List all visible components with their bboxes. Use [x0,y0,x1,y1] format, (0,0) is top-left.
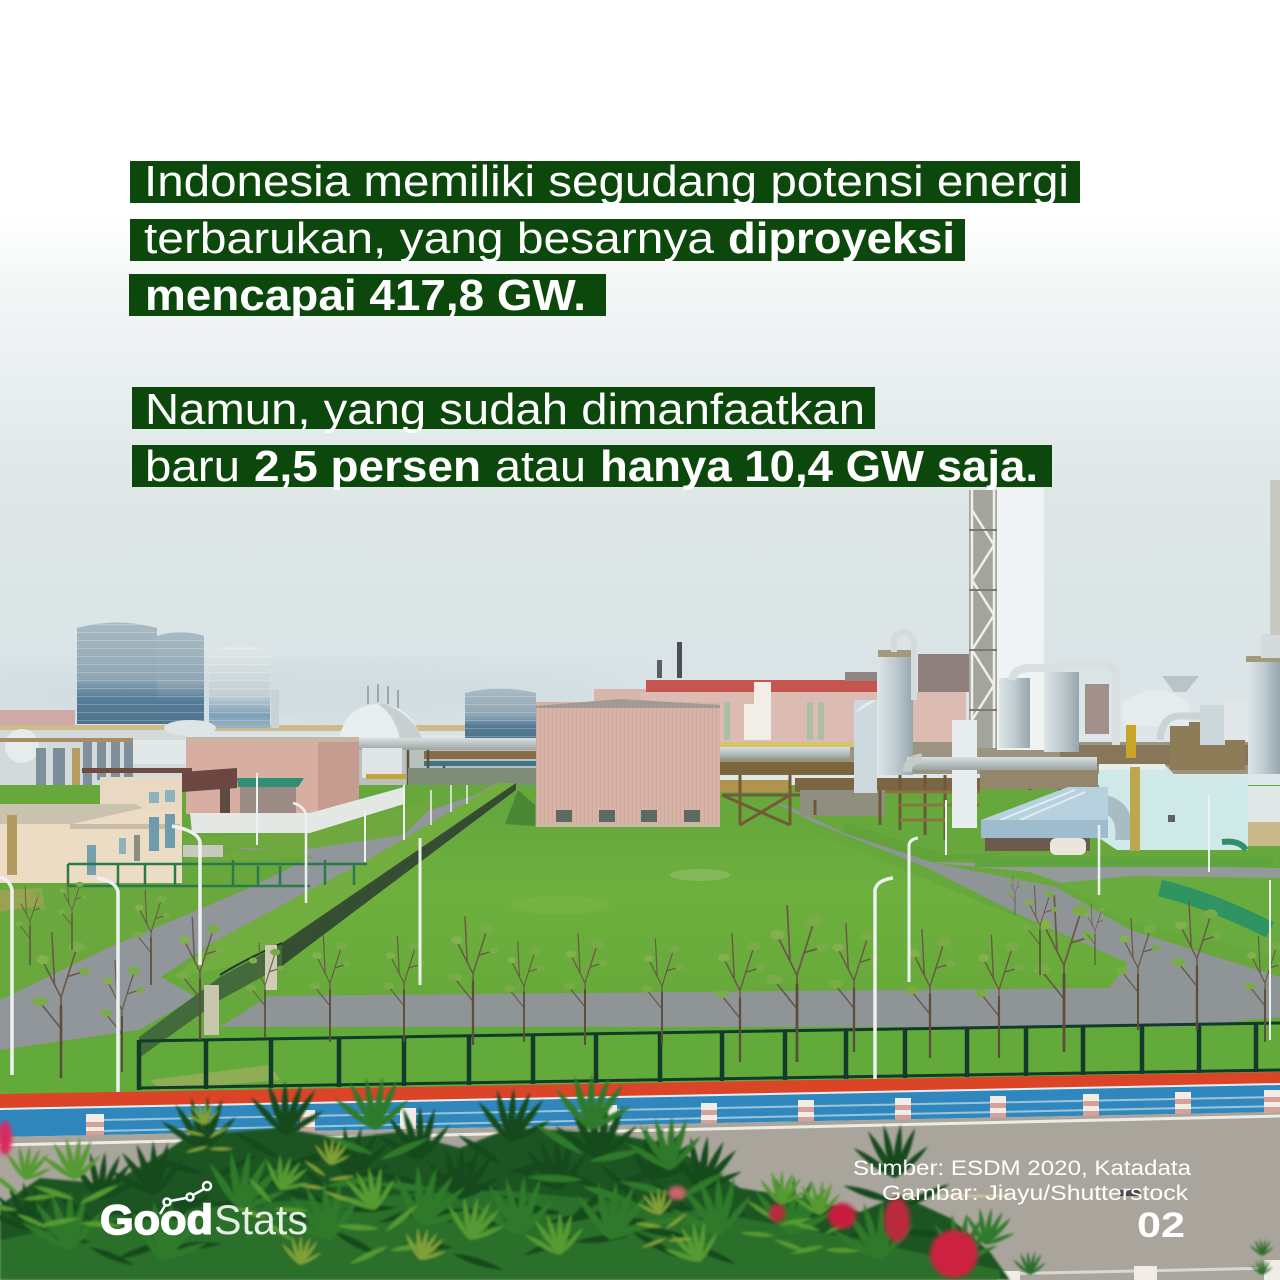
headline paragraph: utilised [132,385,1052,491]
dome tank [339,684,423,740]
dark sprigs [0,1076,957,1274]
grass strip beside fence [175,783,516,977]
line 2: terbarukan, yang besarnya [144,214,715,263]
line 5: atau [495,442,586,491]
logo: GoodStats: Good [100,1196,213,1243]
logo: GoodStats: Stats [214,1196,308,1243]
beige building left [0,777,182,883]
line 5: 2,5 persen [254,442,481,491]
line 3: mencapai 417,8 GW. [145,271,586,320]
source credit [853,1157,1191,1205]
front lawn [0,1027,1280,1096]
front fence [139,1022,1280,1090]
young trees [15,876,1280,1078]
gate fence [68,860,367,887]
street lamps [0,773,1270,1105]
left lawn [0,885,260,992]
back red-roof hall [594,642,970,744]
foreground foliage [0,1066,1021,1280]
page number: 02 [1137,1206,1185,1245]
asphalt road [0,1112,1280,1280]
blue tank centre [465,688,536,738]
blue track [0,1084,1280,1137]
red bottlebrush flowers [0,1121,978,1278]
far kerb rail [990,1260,1280,1280]
green pipe [1160,888,1270,930]
courtyard [183,798,440,862]
line 1: Indonesia memiliki segudang potensi energi [144,157,1069,206]
process columns [854,480,1280,828]
right road and cross road [220,800,1280,1027]
line 5 [132,442,1052,491]
mid green sprigs [14,1066,1021,1276]
ground base [0,785,1280,1105]
pink building left [82,737,359,814]
main pink building [536,699,720,827]
photo: industrial plant [0,480,1280,1280]
tall tower with lattice [969,488,1044,750]
source credit: Gambar: Jiayu/Shutterstock [882,1182,1189,1205]
right lawns [844,822,1280,957]
icon: rising line chart [160,1182,211,1214]
road bollards [86,1090,1280,1142]
bright sprigs [0,1132,861,1275]
red track [0,1072,1280,1109]
logo: GoodStats [100,1182,308,1243]
central lawn [269,790,1128,995]
headline paragraph: potential [129,157,1080,320]
line 5: hanya 10,4 GW saja. [600,442,1038,491]
line 5: baru [145,442,240,491]
spherical tanks and columns left [0,720,216,809]
storage tanks left [77,622,279,728]
source credit: Sumber: ESDM 2020, Katadata [853,1157,1191,1180]
distant roofs left [0,710,530,731]
right plant pipework [720,722,1280,840]
line 4: Namun, yang sudah dimanfaatkan [145,385,865,434]
left road [0,782,500,1050]
light blue buildings right [981,764,1280,855]
diagonal mesh fence [139,783,516,1058]
horizon haze [0,675,660,715]
white perimeter wall [190,787,404,833]
yellow-green sprigs [177,1097,696,1269]
sprigs on the right road [1012,1238,1275,1276]
line 2: diproyeksi [728,214,955,263]
line 2 [130,214,965,263]
pipe racks behind [359,738,537,793]
